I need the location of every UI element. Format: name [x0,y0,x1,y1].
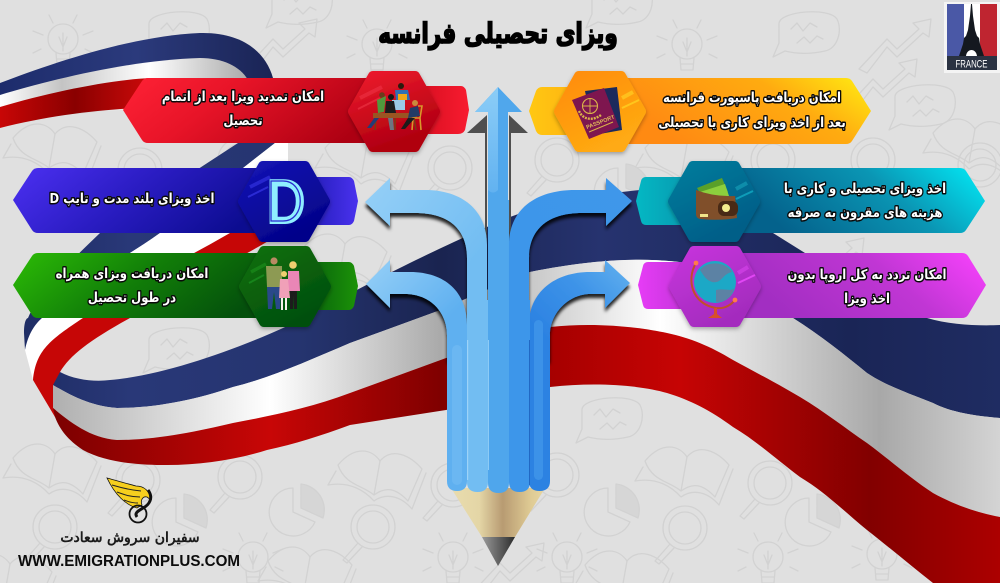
panel: blue, long-stay type D visa [13,165,358,238]
logo and website [18,478,240,570]
arrow: straight up [475,87,522,300]
text: امکان تردد به کل اروپا بدون [787,266,947,282]
hexagon with globe icon [674,251,756,322]
France flag badge with Eiffel tower: FRANCE [956,58,988,70]
text: اخذ ویزای بلند مدت و تایپ D [50,190,214,206]
hexagon with letter D [243,165,325,238]
arrow: curved right upper [509,178,632,340]
text: اخذ ویزای تحصیلی و کاری با [784,180,946,196]
pencil columns [447,200,550,493]
France flag badge with Eiffel tower [944,2,1000,73]
panel: orange, French passport [529,76,871,147]
arrow: curved right lower [529,260,630,360]
icon: globe on stand [691,261,737,318]
panel: green, companion visa [13,251,358,322]
hexagon with passport icon [559,76,641,147]
pencil with five arrows [365,87,632,566]
text [658,89,846,130]
panel: cyan, low-cost visa [636,166,985,237]
company name: سفیران سروش سعادت [60,530,200,546]
icon: people around table [367,83,422,130]
text [784,180,946,220]
text: در طول تحصیل [88,289,177,305]
text: امکان تمدید ویزا بعد از اتمام [162,88,324,105]
icon: passports: PASSPORT [586,114,616,131]
hexagon with team icon [353,76,435,147]
arrow: curved left upper [365,178,487,340]
icon: family [266,257,300,310]
text: هزینه های مقرون به صرفه [788,204,942,220]
panel: red, visa extension [123,76,469,147]
panel: magenta, travel across Europe [638,251,986,322]
text [787,266,947,306]
text: بعد از اخذ ویزای کاری یا تحصیلی [658,114,846,130]
text: امکان دریافت پاسپورت فرانسه [663,89,841,105]
icon: wallet with banknotes [696,178,738,220]
text [56,265,208,305]
pencil tip [451,488,545,566]
title: ویزای تحصیلی فرانسه [378,17,618,51]
website: WWW.EMIGRATIONPLUS.COM [18,553,240,570]
hexagon with family icon [244,251,326,322]
text: تحصیل [223,112,263,128]
text: اخذ ویزا [844,290,890,306]
arrow: curved left lower [366,260,467,360]
text [162,88,324,128]
icon: winged swan logo [107,478,151,522]
hexagon with wallet icon [673,166,755,237]
text: امکان دریافت ویزای همراه [56,265,208,281]
icon: letter D: D [266,165,306,238]
up arrow shadow wings [467,115,528,300]
